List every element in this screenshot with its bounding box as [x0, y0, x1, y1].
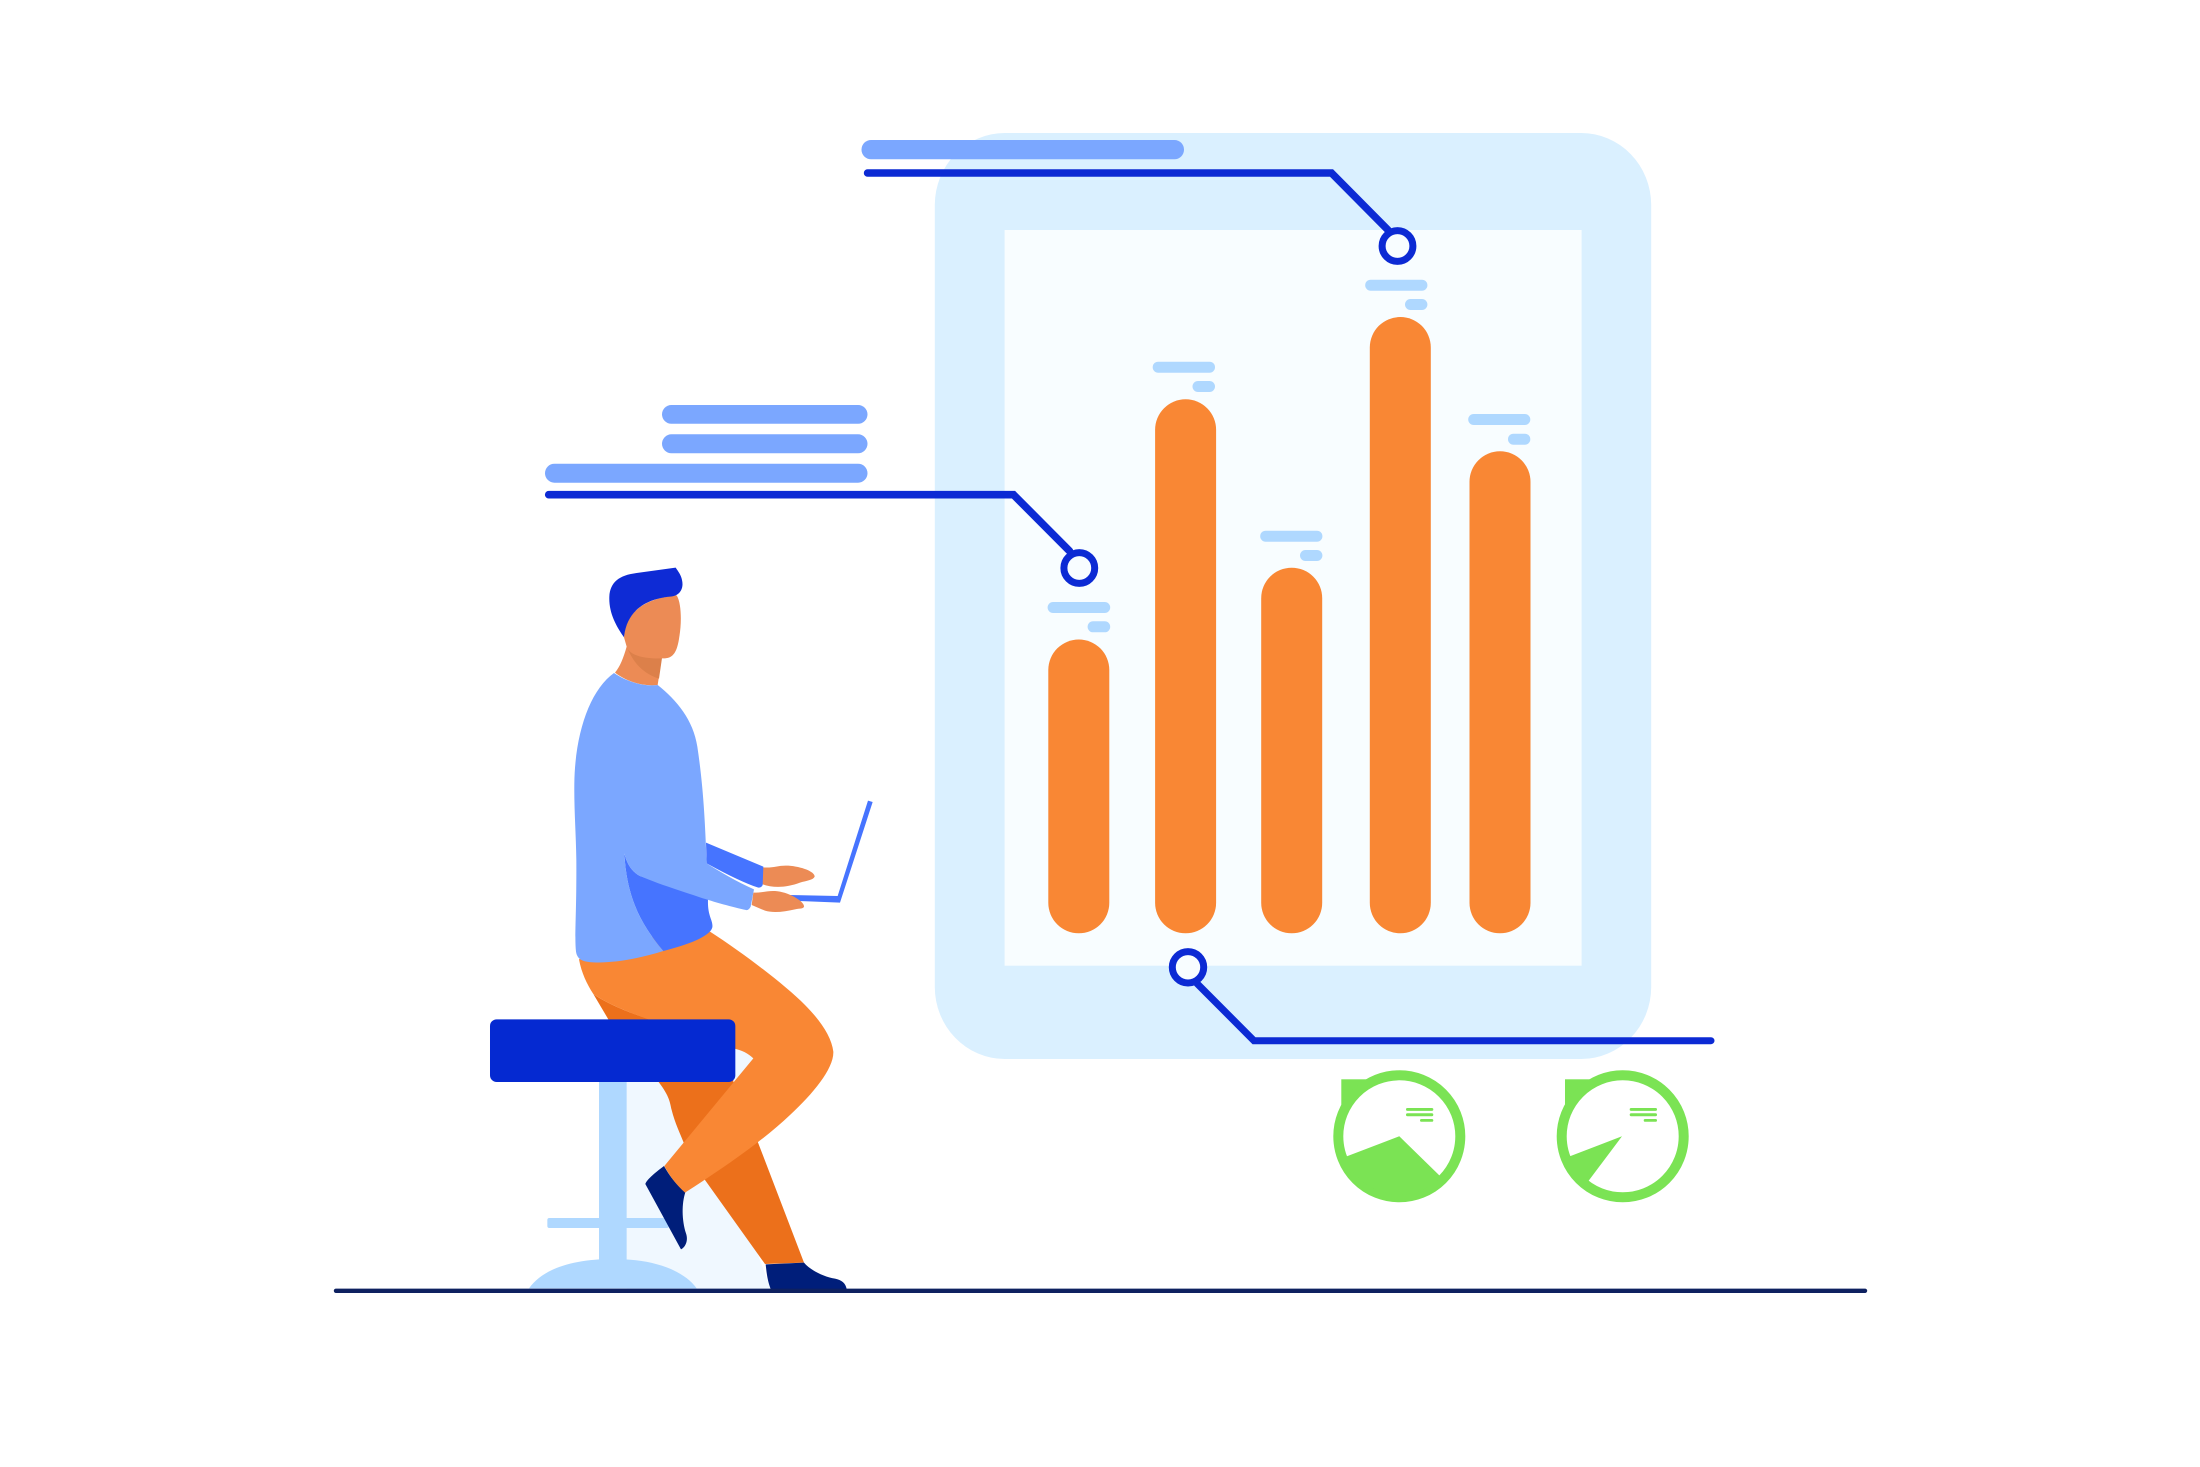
pie chart icon: large share [1338, 1075, 1460, 1197]
front shoe [645, 1166, 687, 1249]
bar 5 [1470, 451, 1530, 933]
bar 3 label placeholder [1260, 531, 1322, 561]
stool seat [490, 1019, 735, 1082]
ground line [336, 1289, 1865, 1293]
back sleeve [706, 843, 763, 888]
back leg [593, 994, 804, 1264]
callout: left leader line and marker [549, 495, 1095, 583]
shirt shadow [624, 853, 712, 951]
panel: tablet screen [1005, 230, 1582, 966]
laptop [790, 801, 873, 903]
neck [615, 647, 662, 685]
bar 5 label placeholder [1468, 414, 1530, 445]
callout: top heading placeholder [862, 140, 1184, 159]
bar 1 [1048, 640, 1109, 933]
head [624, 595, 681, 658]
stool footrest [547, 1218, 669, 1228]
callout: top leader line and marker [868, 173, 1413, 261]
bar 1 label placeholder [1048, 602, 1110, 632]
lower hand [752, 891, 804, 912]
upper hand [762, 866, 815, 887]
bar 3 [1261, 568, 1322, 933]
illustration: stool and legs [490, 932, 847, 1289]
front leg [579, 932, 833, 1193]
back shoe [766, 1263, 847, 1289]
illustration: person upper body with laptop [574, 568, 873, 962]
bar chart [1048, 280, 1530, 933]
hair [609, 568, 682, 637]
stool base [529, 1259, 697, 1288]
callout: bottom leader line and marker [1172, 952, 1711, 1041]
panel: tablet device [935, 133, 1651, 1059]
stool pole [599, 1080, 627, 1262]
bar 2 [1155, 399, 1216, 933]
pie chart icon: small share [1562, 1075, 1684, 1197]
neck shadow [627, 647, 662, 679]
callout: left text placeholder [545, 405, 868, 483]
stool shadow [627, 1047, 771, 1289]
bar 2 label placeholder [1153, 362, 1215, 392]
bar 4 label placeholder [1365, 280, 1427, 310]
shirt [574, 673, 754, 962]
bar 4 [1370, 317, 1431, 933]
